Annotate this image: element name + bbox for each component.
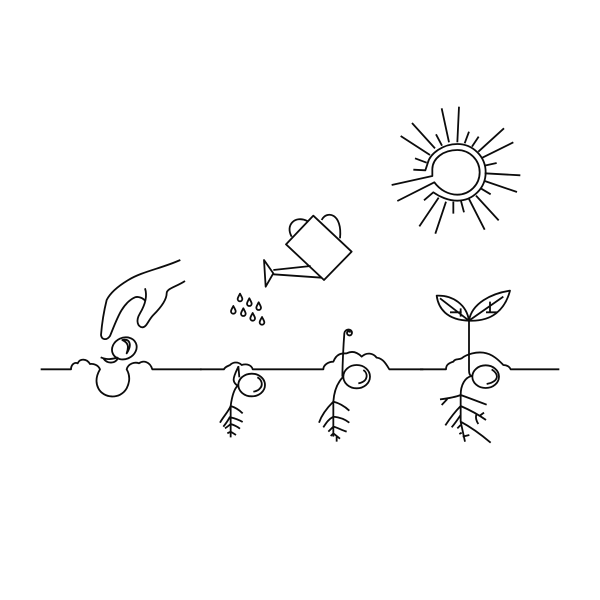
- young plant with leaves and roots: [437, 291, 510, 443]
- seedling with curled shoot: [319, 329, 370, 442]
- ground with young plant mound: [420, 352, 559, 369]
- sprouting seed with roots: [220, 366, 265, 437]
- icon: water drops: [231, 294, 264, 325]
- icon: sun: [392, 107, 520, 234]
- icon: falling seed: [101, 333, 140, 363]
- ground with soil mounds: [200, 352, 423, 369]
- icon: hand: [101, 260, 185, 339]
- ground with planting hole: [41, 360, 202, 396]
- icon: watering can: [264, 215, 352, 287]
